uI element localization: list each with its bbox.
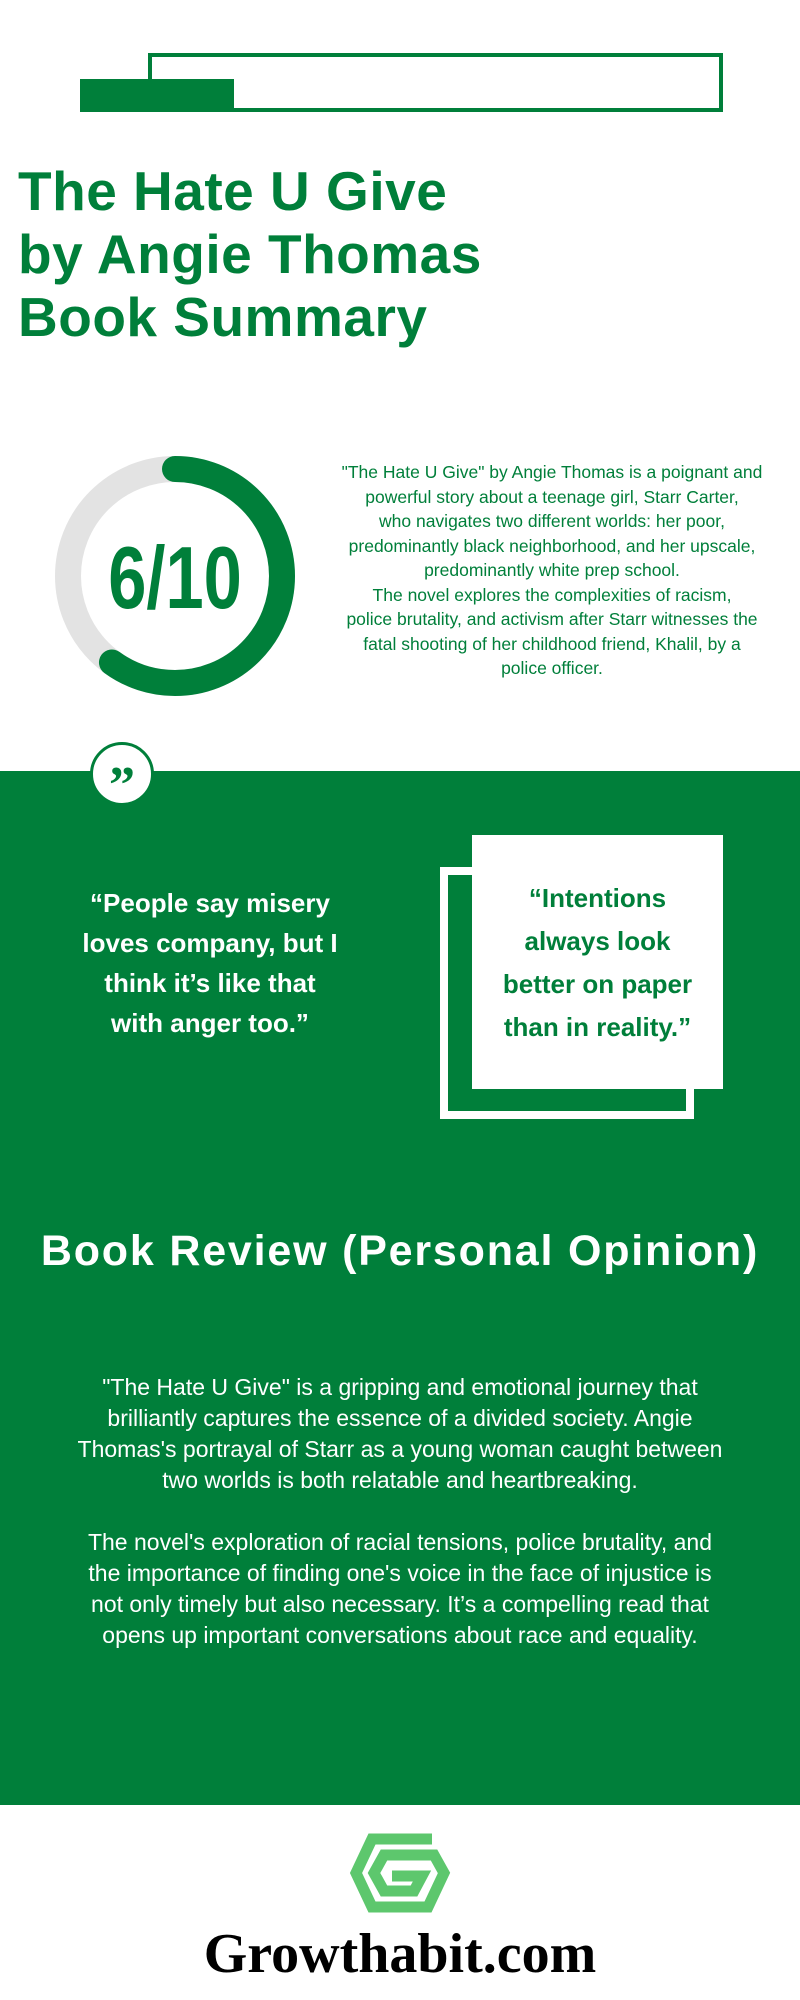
title: Book Summary bbox=[18, 286, 427, 348]
review text: "The Hate U Give" is a gripping and emotional journey that bbox=[102, 1374, 698, 1400]
rating ring chart bbox=[55, 456, 295, 696]
quote card right: always look bbox=[525, 926, 670, 956]
rating ring chart: 6/10 bbox=[108, 529, 242, 627]
quote left: “People say misery bbox=[90, 888, 330, 918]
summary text: predominantly white prep school. bbox=[424, 560, 680, 580]
quote card right: better on paper bbox=[503, 969, 692, 999]
summary text bbox=[342, 462, 762, 678]
summary text: The novel explores the complexities of racism, bbox=[373, 584, 731, 604]
quote card right bbox=[440, 835, 723, 1119]
footer brand: Growthabit.com bbox=[204, 1923, 596, 1985]
quote left: with anger too.” bbox=[111, 1008, 309, 1038]
review text bbox=[78, 1374, 722, 1648]
header decoration bbox=[80, 53, 723, 112]
summary text: powerful story about a teenage girl, Starr Carter, bbox=[365, 486, 739, 506]
title: The Hate U Give bbox=[18, 160, 447, 222]
review text: the importance of finding one's voice in the face of injustice is bbox=[88, 1560, 712, 1586]
title: by Angie Thomas bbox=[18, 223, 482, 285]
quote left: think it’s like that bbox=[104, 968, 316, 998]
summary text: who navigates two different worlds: her poor, bbox=[379, 511, 725, 531]
icon: quote mark circle bbox=[90, 742, 154, 806]
review text: brilliantly captures the essence of a divided society. Angie bbox=[107, 1405, 693, 1431]
summary text: predominantly black neighborhood, and her upscale, bbox=[349, 536, 755, 556]
quote card right: “Intentions bbox=[529, 883, 666, 913]
green section bbox=[0, 771, 800, 1805]
quote left bbox=[82, 888, 338, 1038]
title bbox=[18, 160, 482, 348]
summary text: fatal shooting of her childhood friend, Khalil, by a bbox=[363, 634, 741, 654]
review text: not only timely but also necessary. It’s a compelling read that bbox=[91, 1591, 709, 1617]
quote card right: than in reality.” bbox=[504, 1012, 691, 1042]
summary text: police officer. bbox=[501, 658, 603, 678]
summary text: police brutality, and activism after Starr witnesses the bbox=[346, 609, 758, 629]
summary text: "The Hate U Give" by Angie Thomas is a poignant and bbox=[342, 462, 762, 482]
icon: growthabit logo bbox=[350, 1834, 450, 1912]
review text: two worlds is both relatable and heartbreaking. bbox=[162, 1467, 638, 1493]
review text: Thomas's portrayal of Starr as a young woman caught between bbox=[78, 1436, 722, 1462]
review heading: Book Review (Personal Opinion) bbox=[41, 1227, 759, 1275]
quote left: loves company, but I bbox=[82, 928, 338, 958]
review text: opens up important conversations about race and equality. bbox=[102, 1622, 698, 1648]
review text: The novel's exploration of racial tensions, police brutality, and bbox=[88, 1529, 712, 1555]
icon: quote mark circle: ” bbox=[109, 757, 135, 814]
